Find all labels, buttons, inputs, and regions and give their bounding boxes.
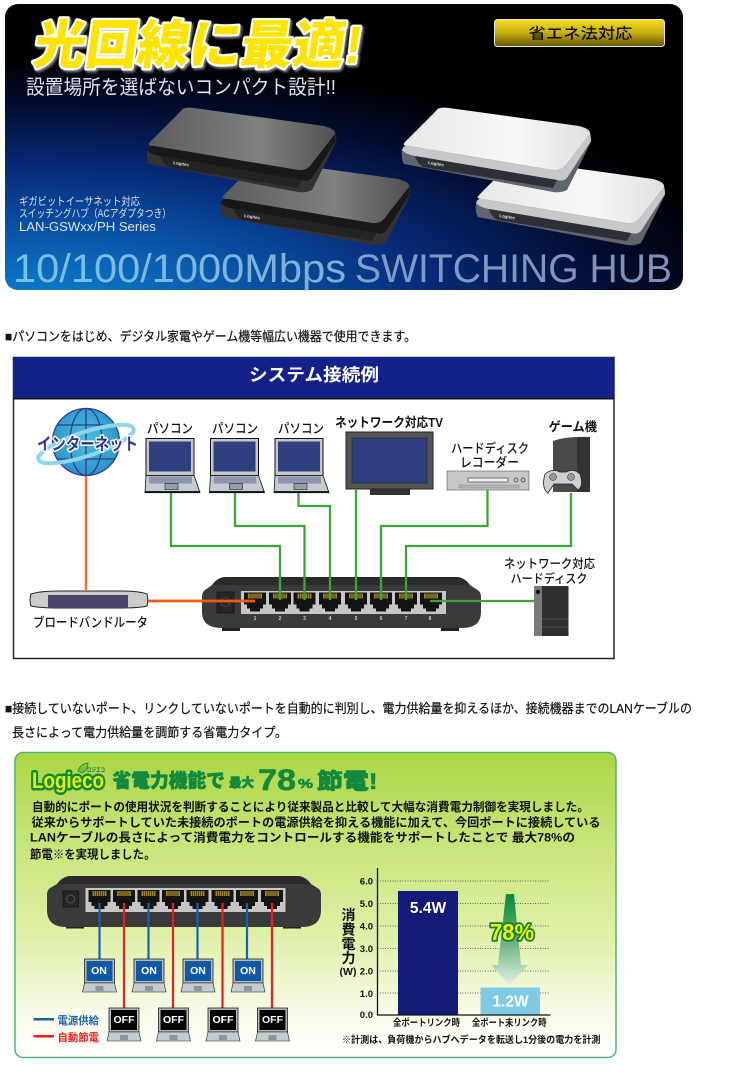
gridlines and axis labels: 5.0	[360, 899, 373, 910]
cables: power supplied (blue)	[100, 903, 247, 959]
product description	[19, 195, 171, 234]
panel: system connection example	[13, 357, 614, 658]
callout: 78%: 78%	[490, 919, 534, 945]
y axis title: (W)	[340, 966, 356, 978]
product photo: dark switching hub (front): Logitec	[173, 160, 190, 168]
x axis labels: 全ポート未リンク時	[472, 1017, 547, 1029]
y axis title: 電	[342, 936, 356, 952]
body text: 節電※を実現しました。	[30, 846, 156, 862]
laptops: OFF: OFF	[114, 1014, 135, 1026]
gridlines and axis labels: 4.0	[360, 922, 373, 932]
laptops: ON: ON	[141, 965, 157, 977]
y axis title	[340, 907, 356, 978]
text: power saving description	[5, 701, 692, 740]
panel header	[13, 357, 614, 400]
logo: Logieco: ロジエコ	[87, 767, 105, 774]
device: PC 1: パソコン	[147, 421, 193, 436]
heading: main catch copy: 光回線に最適!	[30, 17, 366, 75]
legend: 自動節電	[58, 1031, 99, 1044]
device: broadband router	[30, 591, 148, 630]
cables: auto saving (red)	[124, 903, 272, 1008]
device: PC 2	[210, 421, 264, 493]
switching hub with ports: 7	[405, 616, 408, 622]
legend: 電源供給	[58, 1014, 99, 1027]
footnote: ※計測は、負荷機からハブへデータを転送し1分後の電力を計測	[342, 1034, 600, 1046]
laptops: ON: ON	[240, 965, 256, 977]
device: PC 3	[274, 421, 329, 493]
laptops: OFF: OFF	[262, 1014, 284, 1026]
device: network TV: ネットワーク対応TV	[335, 415, 443, 430]
y axis title: 力	[342, 950, 356, 966]
gridlines and axis labels: 6.0	[360, 876, 373, 888]
panel header: システム接続例	[249, 365, 379, 385]
badge: energy saving law: 省エネ法対応	[528, 26, 632, 42]
big product title: 10/100/1000Mbps	[13, 247, 346, 291]
panel: hero banner	[5, 4, 683, 291]
switching hub with ports: 5	[355, 616, 358, 622]
switching hub with ports: 8	[429, 616, 432, 622]
gridlines and axis labels: 1.0	[360, 989, 373, 1000]
icon: internet globe: インターネット	[37, 435, 138, 454]
bar: all ports unlinked 1.2W: 1.2W	[492, 994, 529, 1010]
big product title: SWITCHING HUB	[355, 247, 672, 291]
heading: power saving up to 78%: 節電!	[317, 769, 378, 794]
connection lines: green	[171, 489, 571, 601]
bar: all ports linked 5.4W: 5.4W	[410, 900, 446, 917]
legend	[34, 1014, 99, 1044]
product description: LAN-GSWxx/PH Series	[19, 220, 156, 234]
laptops: OFF: OFF	[212, 1014, 234, 1026]
arrow: reduction	[491, 894, 528, 985]
gridlines and axis labels	[360, 876, 550, 1021]
switching hub with ports: 2	[279, 616, 282, 622]
badge: energy saving law	[494, 20, 664, 46]
body text: 従来からサポートしていた未接続のポートの電源供給を抑える機能に加えて、今回ポートに接続している	[32, 814, 601, 830]
text: power saving description: ■接続していないポート、リンクしていないポートを自動的に判別し、電力供給量を抑えるほか、接続機器までのLANケーブルの	[5, 701, 692, 716]
switching hub with ports: 3	[303, 616, 306, 622]
product description: スイッチングハブ（ACアダプタつき）	[19, 206, 171, 220]
connection line: router to hub	[148, 600, 255, 602]
device: hard disk recorder: レコーダー	[460, 455, 519, 470]
device: network TV	[335, 415, 443, 495]
y axis title: 費	[342, 922, 356, 938]
gridlines and axis labels: 2.0	[360, 966, 373, 978]
bar: all ports linked 5.4W	[398, 891, 458, 1015]
device: game console: ゲーム機	[548, 419, 597, 434]
product photo: white switching hub (rear)	[476, 161, 665, 245]
gridlines and axis labels: 3.0	[360, 944, 373, 955]
switching hub with ports: 4	[329, 616, 332, 622]
gridlines and axis labels: 0.0	[360, 1010, 373, 1021]
device: network hard disk: ネットワーク対応	[504, 556, 595, 571]
text: power saving description: 長さによって電力供給量を調節する省電力タイプ。	[12, 725, 287, 740]
product photo: dark switching hub (front)	[147, 108, 336, 192]
icon: internet globe	[35, 408, 138, 476]
product description: ギガビットイーサネット対応	[19, 195, 140, 208]
switching hub with ports	[47, 876, 321, 928]
device: hard disk recorder: ハードディスク	[451, 441, 529, 456]
big product title	[13, 247, 672, 291]
laptops: ON: ON	[190, 965, 206, 977]
panel: Logieco power saving	[15, 752, 616, 1058]
body text: 自動的にポートの使用状況を判断することにより従来製品と比較して大幅な消費電力制御を実現しました。	[32, 799, 589, 814]
product photo: white switching hub (rear): Logitec	[499, 213, 516, 221]
device: PC 3: パソコン	[278, 421, 324, 436]
device: PC 2: パソコン	[212, 421, 258, 436]
heading: power saving up to 78%: 78	[258, 764, 296, 797]
connection line: internet to router	[85, 475, 87, 590]
heading: power saving up to 78%	[112, 764, 378, 797]
device: PC 1	[145, 421, 200, 493]
switching hub with ports: 1	[254, 616, 257, 622]
bar: all ports unlinked 1.2W	[480, 988, 540, 1015]
heading: power saving up to 78%: 省電力機能で	[112, 769, 225, 792]
switching hub with ports: 6	[380, 616, 383, 622]
y axis title: 消	[342, 907, 356, 923]
product photo: white switching hub (front)	[402, 108, 591, 192]
text: usage note: ■パソコンをはじめ、デジタル家電やゲーム機等幅広い機器で使用できます。	[5, 329, 416, 344]
heading: power saving up to 78%: %	[298, 776, 314, 791]
device: game console	[544, 419, 597, 493]
subheading: 設置場所を選ばないコンパクト設計!!	[26, 76, 336, 99]
device: network hard disk: ハードディスク	[510, 571, 588, 586]
product photo: dark switching hub (rear)	[221, 161, 410, 245]
laptops: ON: ON	[91, 965, 107, 977]
device: broadband router: ブロードバンドルータ	[33, 615, 148, 630]
body text: LANケーブルの長さによって消費電力をコントロールする機能をサポートしたことで 最大78%の	[30, 830, 575, 844]
laptops: OFF: OFF	[163, 1014, 185, 1026]
axes	[378, 868, 550, 1015]
product photo: white switching hub (front): Logitec	[428, 160, 445, 168]
x axis labels: 全ポートリンク時	[393, 1017, 460, 1029]
product photo: dark switching hub (rear): Logitec	[244, 213, 261, 221]
switching hub with ports	[202, 577, 481, 631]
laptops: ON	[82, 959, 265, 992]
logo: Logieco: Logieco	[32, 768, 104, 793]
laptops: OFF	[107, 1008, 290, 1041]
device: hard disk recorder	[447, 441, 529, 490]
device: network hard disk	[504, 556, 595, 636]
bar chart: power consumption	[340, 868, 600, 1046]
body text	[30, 799, 601, 862]
heading: power saving up to 78%: 最大	[229, 775, 254, 790]
x axis labels	[393, 1017, 547, 1029]
